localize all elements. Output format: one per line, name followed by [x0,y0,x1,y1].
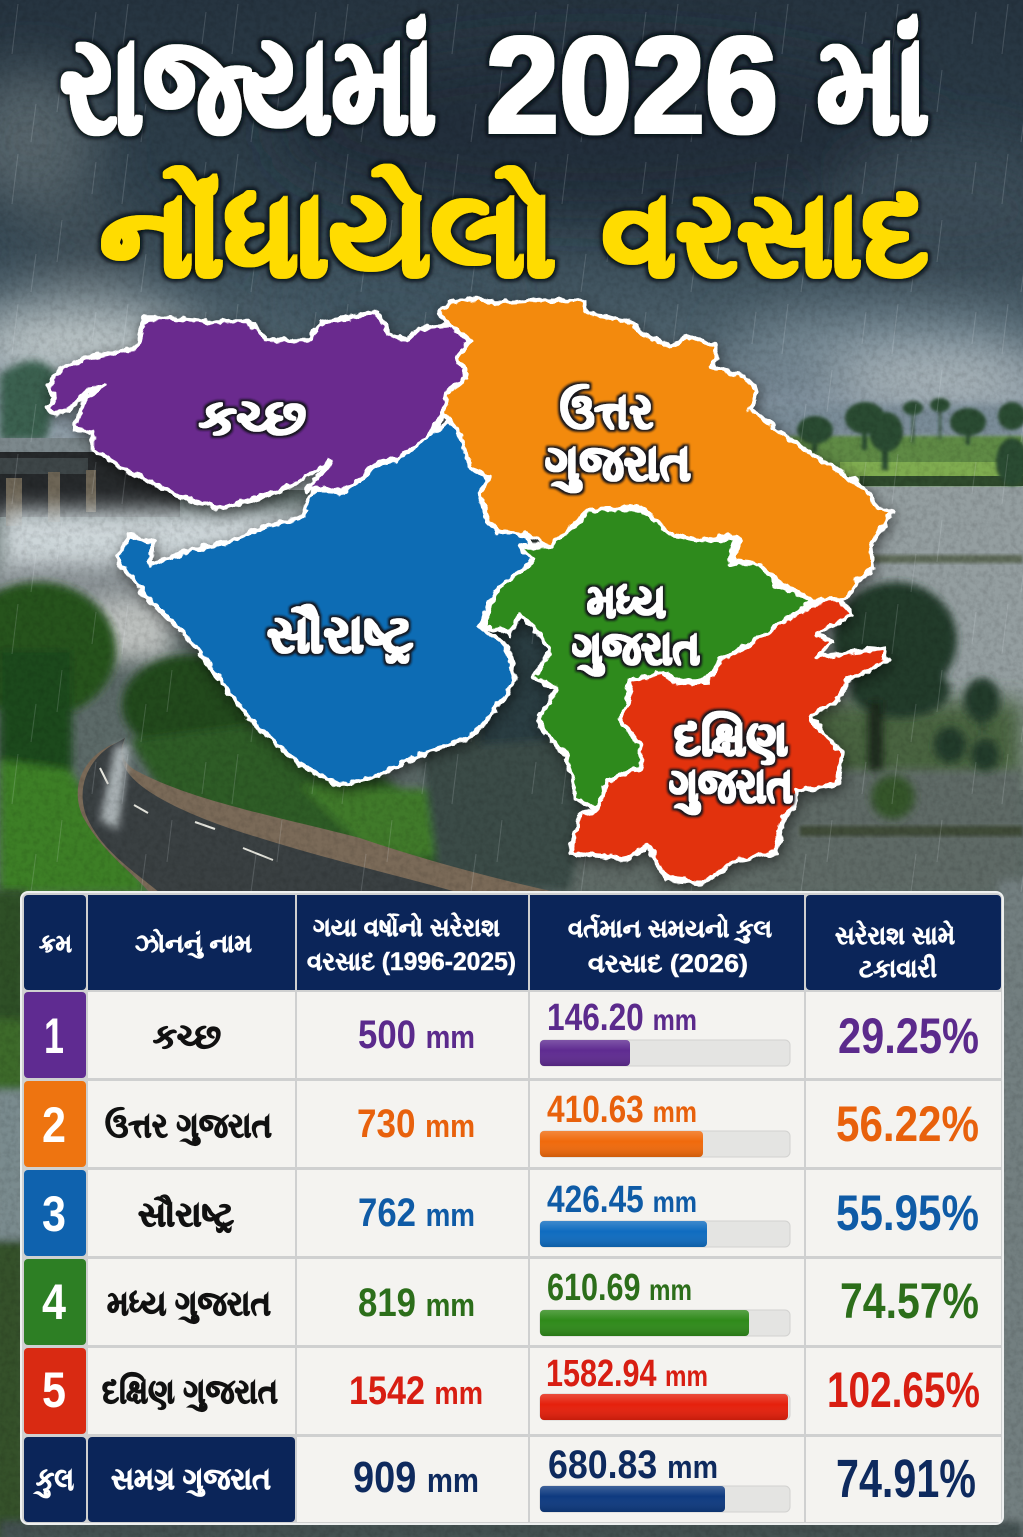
row 6: total Gujarat: 680.83 mm [548,1443,718,1487]
row 4: Central Gujarat [24,1259,1001,1345]
row 2: North Gujarat: 56.22% [836,1096,979,1152]
row 5: South Gujarat: 102.65% [827,1362,980,1418]
row 5: South Gujarat: દક્ષિણ ગુજરાત [102,1372,278,1412]
row 4: Central Gujarat: મધ્ય ગુજરાત [107,1285,271,1324]
zone shape: Central Gujarat [483,508,813,810]
table header row: વર્તમાન સમયનો કુલ [568,914,772,944]
table header row [24,895,1001,990]
zone shape: Kutch [47,312,470,508]
right green fields [740,436,1023,486]
muddy lower ground on the right [800,700,1023,785]
zone shape: South Gujarat [570,600,887,883]
row 1: Kutch: 1 [44,1008,64,1064]
row 5: South Gujarat: 5 [42,1362,66,1418]
row 1: Kutch: કચ્છ [153,1018,221,1056]
dark tree in the right foreground [833,582,1000,819]
table header row: સરેરાશ સામે [835,921,955,950]
row 1: Kutch [24,992,1001,1078]
table header row: ગયા વર્ષોનો સરેરાશ [313,913,500,942]
row 4: Central Gujarat: 4 [42,1274,66,1330]
label: North Gujarat: ઉત્તર [560,383,653,439]
table header row: ઝોનનું નામ [135,929,252,959]
title line 2: નોંધાયેલો [100,166,556,301]
table header row: વરસાદ (2026) [588,950,748,978]
storm clouds [0,50,1023,405]
title line 1: રાજ્યમાં [60,9,436,161]
row 4: Central Gujarat: 74.57% [840,1273,979,1329]
label: Saurashtra: સૌરાષ્ટ્ર [267,604,413,664]
row 5: South Gujarat: 1582.94 mm [546,1353,708,1395]
row 2: North Gujarat: 410.63 mm [547,1089,697,1131]
flooded fields on the right [770,487,1023,790]
zone shape: Saurashtra [117,417,535,785]
table header row: ટકાવારી [859,955,937,983]
table header row: ક્રમ [39,930,72,958]
label: North Gujarat [545,383,691,493]
label: Kutch: કચ્છ [199,392,306,445]
row 6: total Gujarat: 74.91% [836,1449,976,1509]
label: South Gujarat: દક્ષિણ [674,711,788,766]
label: North Gujarat: ગુજરાત [545,435,691,493]
row 2: North Gujarat [24,1081,1001,1167]
row 6: total Gujarat: 909 mm [353,1453,479,1502]
row 6: total Gujarat [24,1437,1001,1522]
map of Gujarat zones [47,298,892,883]
title line 1: માં [817,9,929,161]
data table [21,892,1003,1524]
row 2: North Gujarat: ઉત્તર ગુજરાત [105,1106,272,1146]
row 5: South Gujarat: 1542 mm [349,1369,483,1413]
row 4: Central Gujarat: 610.69 mm [547,1267,692,1309]
label: South Gujarat [669,711,793,815]
label: Central Gujarat [572,575,700,676]
row 3: Saurashtra: 762 mm [358,1191,475,1235]
row 1: Kutch: 500 mm [358,1013,475,1057]
green trees and banks on the left [0,582,590,893]
dam with waterfall [0,438,330,660]
title line 1 [60,9,929,161]
row 2: North Gujarat: 2 [42,1097,66,1153]
row 1: Kutch: 29.25% [838,1008,979,1064]
row 2: North Gujarat: 730 mm [357,1102,475,1146]
label: South Gujarat: ગુજરાત [669,760,793,815]
row 3: Saurashtra: 3 [42,1186,66,1242]
title line 2: વરસાદ [602,169,928,301]
table header row: વરસાદ (1996-2025) [307,948,516,976]
label: Central Gujarat: ગુજરાત [572,622,700,676]
lower backdrop around the table [0,880,1023,1537]
left misty forest [0,361,60,440]
zone shape: North Gujarat [440,298,892,600]
row 3: Saurashtra: 426.45 mm [547,1179,697,1221]
row 4: Central Gujarat: 819 mm [358,1281,475,1325]
row 3: Saurashtra: 55.95% [836,1185,979,1241]
row 3: Saurashtra: સૌરાષ્ટ્ર [138,1194,234,1234]
wet road with dirt shoulder [78,738,560,893]
row 6: total Gujarat: કુલ [34,1461,74,1498]
title line 1: 2026 [486,9,778,161]
title line 2 [100,166,928,301]
misty hills on the horizon [760,405,1023,437]
row 6: total Gujarat: સમગ્ર ગુજરાત [111,1463,271,1497]
row 1: Kutch: 146.20 mm [547,997,697,1039]
row 5: South Gujarat [24,1348,1001,1434]
label: Central Gujarat: મધ્ય [587,575,666,627]
row 3: Saurashtra [24,1170,1001,1256]
palm trees on the horizon [797,398,1023,486]
